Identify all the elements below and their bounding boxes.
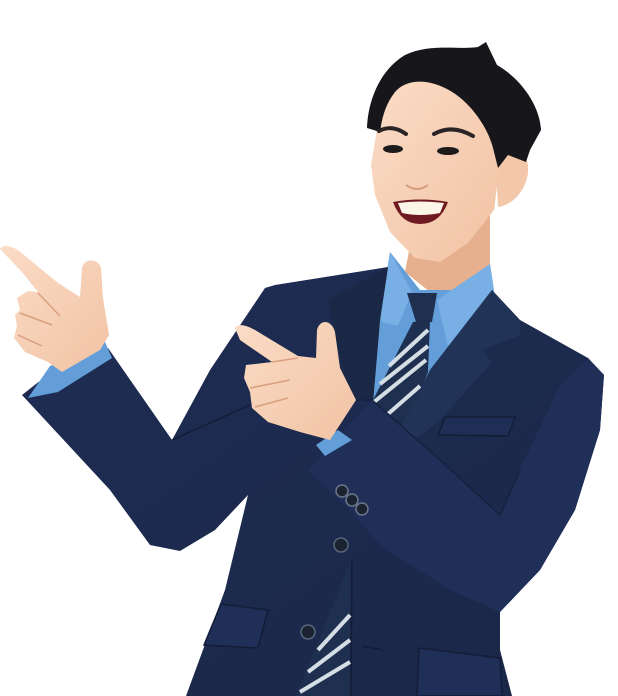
sleeve buttons (336, 485, 368, 515)
nose (406, 185, 428, 189)
face (371, 76, 499, 262)
eyebrows (379, 128, 473, 136)
jacket pockets and seams (172, 405, 515, 696)
smile (393, 200, 448, 224)
necktie (372, 293, 437, 428)
ear (496, 154, 528, 207)
hair (367, 42, 541, 168)
suit jacket body (22, 267, 604, 696)
front sleeve (308, 358, 604, 612)
pointing hand: centre (235, 322, 356, 440)
lower necktie (296, 562, 350, 696)
pointing hand: left (0, 246, 109, 372)
jacket lapels (328, 267, 520, 450)
shirt collar and front (372, 252, 494, 425)
eyes (383, 145, 459, 155)
right shirt cuff (316, 430, 352, 456)
left shirt cuff (28, 342, 112, 398)
neck (405, 190, 490, 300)
jacket buttons (301, 538, 348, 639)
